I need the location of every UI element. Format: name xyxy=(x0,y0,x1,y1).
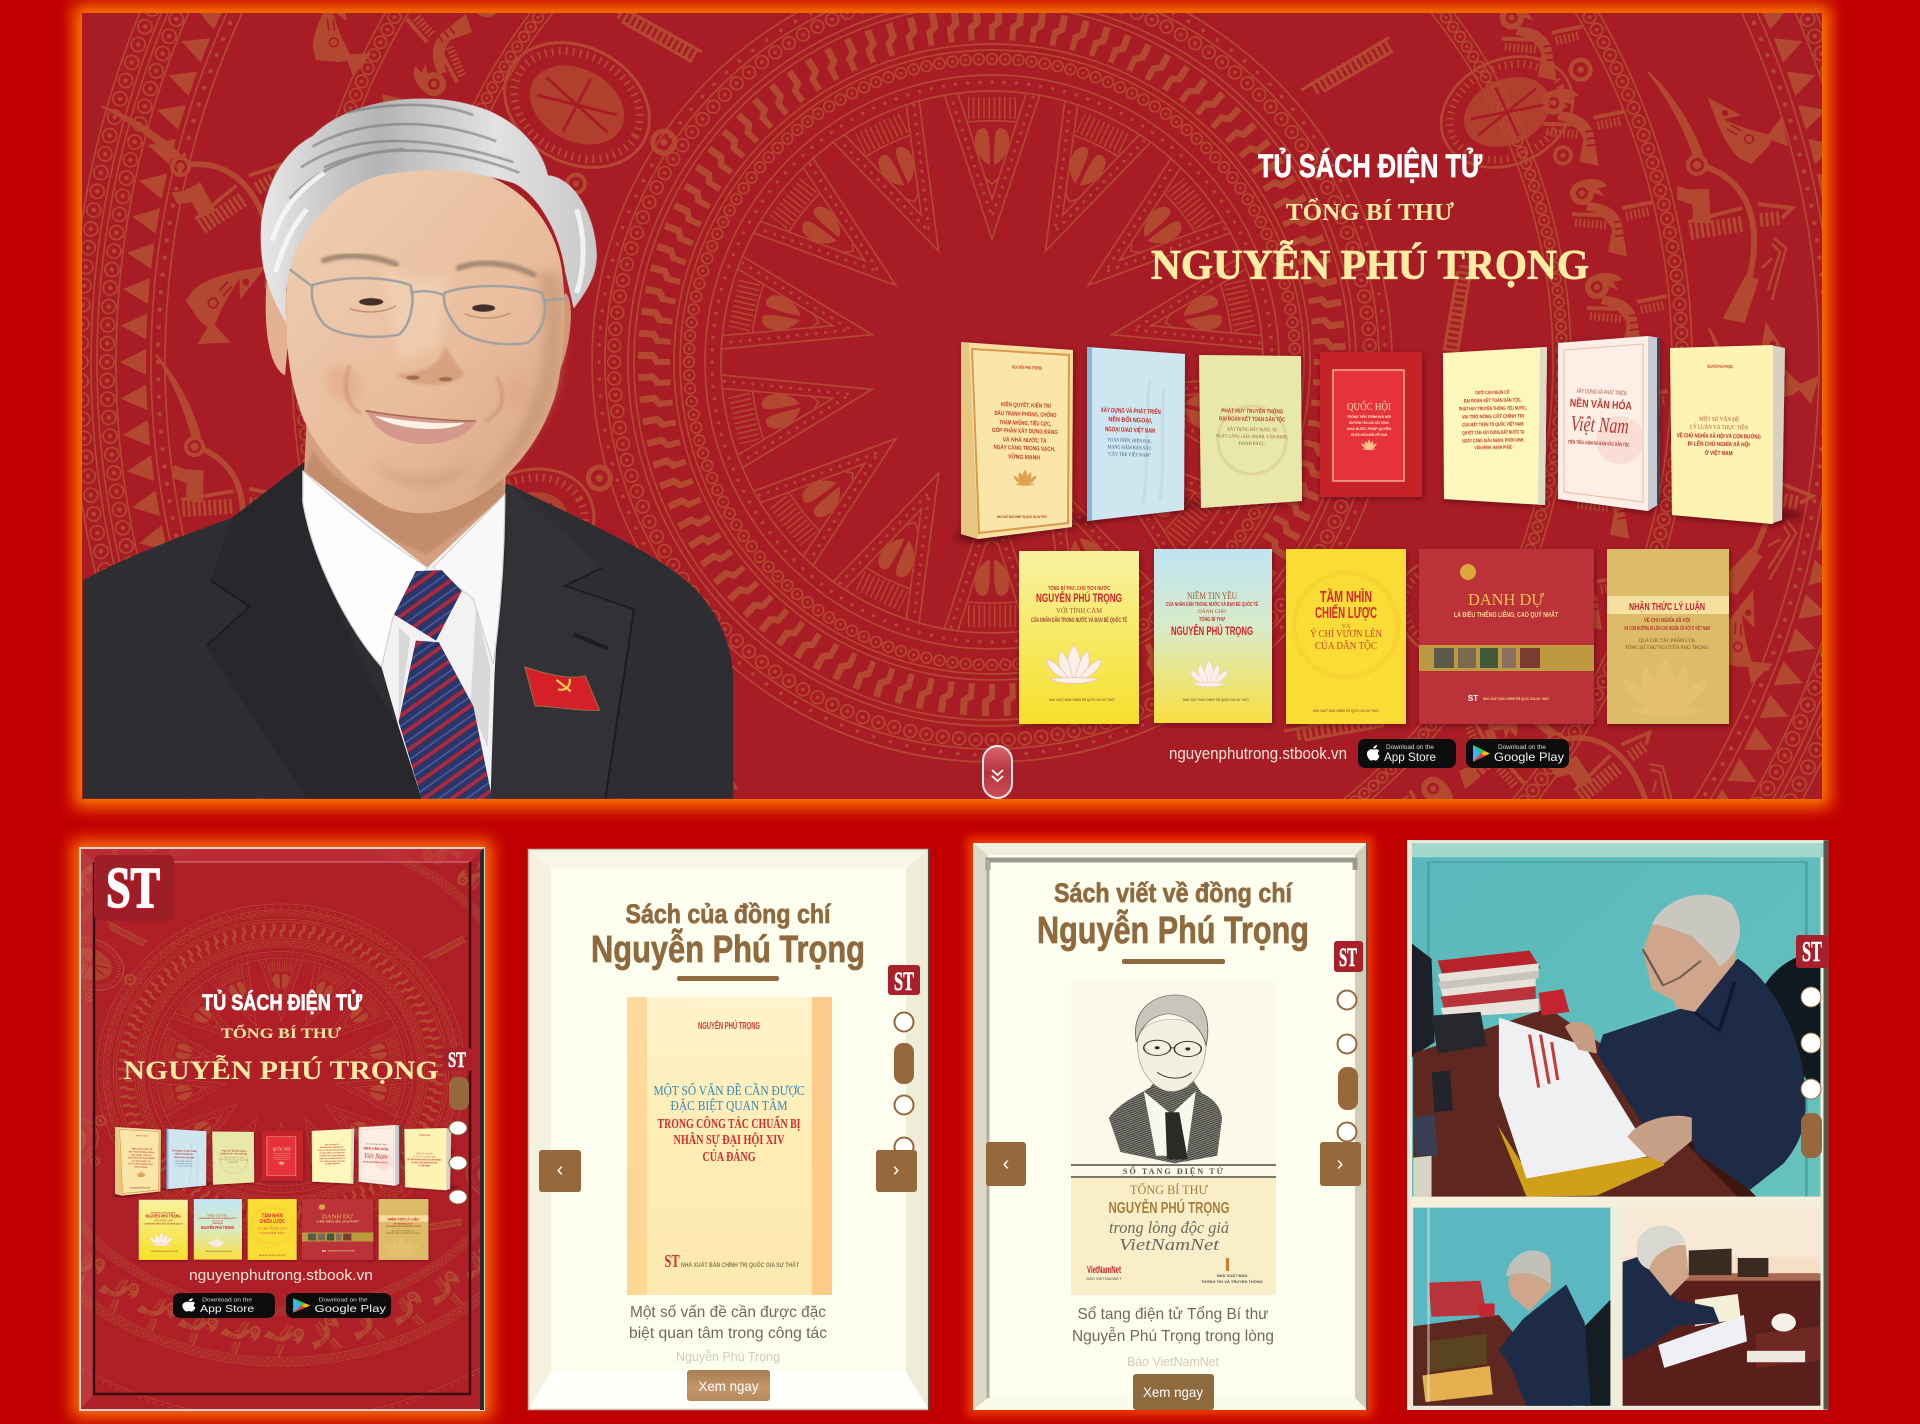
bottom right: man xyxy=(1623,1254,1719,1360)
suit jacket xyxy=(83,460,733,799)
next arrow: › xyxy=(893,1159,899,1181)
face shading xyxy=(326,262,564,497)
view button xyxy=(687,1370,770,1401)
book source: Báo VietNamNet xyxy=(1127,1354,1219,1369)
top photo: desk xyxy=(1413,1008,1756,1197)
nose xyxy=(396,345,465,385)
card Google Play badge xyxy=(286,1293,391,1318)
next arrow: › xyxy=(1337,1153,1343,1175)
cover: condolence book xyxy=(1071,982,1276,1295)
book cover: CỦA ĐẢNG xyxy=(702,1148,756,1165)
panel: books by comrade xyxy=(528,849,929,1410)
card glow xyxy=(72,840,492,1418)
card subtitle: TỔNG BÍ THƯ xyxy=(221,1024,341,1042)
panel: photo collage xyxy=(1407,840,1828,1410)
side ST icon: ST xyxy=(1339,943,1357,972)
card paper xyxy=(528,849,929,1410)
pencil sketch portrait xyxy=(1109,995,1222,1163)
side ST icon: ST xyxy=(1802,937,1822,968)
hero title: Tủ sách điện tử: TỦ SÁCH ĐIỆN TỬ xyxy=(1258,148,1482,184)
shirt body xyxy=(303,471,505,799)
top photo: white album xyxy=(1499,1018,1652,1178)
side ST icon xyxy=(1334,941,1363,972)
App Store badge xyxy=(1358,739,1456,768)
card bevel xyxy=(973,843,1367,1410)
hero orange glow xyxy=(74,5,1830,807)
neck xyxy=(304,418,509,567)
top photo: book stack xyxy=(1438,950,1541,980)
book caption: Một số vấn đề cần được đặc xyxy=(630,1304,826,1321)
top photo: remote and pens xyxy=(1432,1071,1453,1112)
cover: condolence book: NHÀ XUẤT BẢN xyxy=(1217,1273,1247,1278)
heading line 2: Nguyễn Phú Trọng xyxy=(591,927,865,971)
side nav xyxy=(894,1012,914,1156)
top photo: wall xyxy=(1412,840,1820,1197)
card background and drum xyxy=(81,410,483,1409)
bottom right: papers xyxy=(1658,1315,1747,1368)
eyes xyxy=(359,298,383,305)
top photo: left edge objects xyxy=(1412,944,1435,1057)
heading underline xyxy=(677,976,779,981)
panel: books about comrade xyxy=(967,837,1373,1416)
book cover: ST xyxy=(664,1251,680,1271)
book cover: NHÀ XUẤT BẢN CHÍNH TRỊ QUỐC GIA SỰ THẬT xyxy=(681,1261,799,1269)
view button xyxy=(1133,1374,1214,1410)
top photo: head xyxy=(1643,925,1738,1012)
top photo: shirt xyxy=(1597,959,1806,1190)
view button: Xem ngay xyxy=(1143,1384,1203,1400)
heading line 1: Sách viết về đồng chí xyxy=(1054,878,1293,908)
top photo: hands xyxy=(1565,1022,1597,1053)
hero website url: nguyenphutrong.stbook.vn xyxy=(1169,745,1347,763)
card url: nguyenphutrong.stbook.vn xyxy=(189,1267,373,1284)
top photo: yellow folder xyxy=(1498,1125,1664,1197)
card bevel xyxy=(80,848,484,1410)
next arrow xyxy=(876,1150,917,1192)
cover: condolence book: TỔNG BÍ THƯ xyxy=(1130,1182,1209,1197)
card title: TỦ SÁCH ĐIỆN TỬ xyxy=(202,990,363,1015)
book caption: Sổ tang điện tử Tổng Bí thư xyxy=(1078,1305,1269,1323)
hero subtitle: Tổng Bí thư: TỔNG BÍ THƯ xyxy=(1286,199,1454,226)
hero name: Nguyễn Phú Trọng: NGUYỄN PHÚ TRỌNG xyxy=(1151,240,1589,289)
previous arrow: ‹ xyxy=(557,1159,563,1181)
previous arrow: ‹ xyxy=(1003,1153,1009,1175)
bottom right photo xyxy=(1623,1208,1820,1406)
cover: condolence book: VietNamNet xyxy=(1119,1235,1221,1254)
hero background with drum pattern xyxy=(82,13,1822,799)
hair xyxy=(261,98,597,324)
previous arrow xyxy=(539,1150,581,1192)
flag pin xyxy=(525,667,600,710)
heading line 1: Sách của đồng chí xyxy=(626,899,832,929)
top photo: chair xyxy=(1762,953,1820,1095)
next arrow xyxy=(1320,1142,1361,1186)
necktie xyxy=(394,570,462,641)
cover: condolence book: VietNamNet xyxy=(1087,1265,1121,1276)
cover: condolence book: trong lòng độc giả xyxy=(1109,1218,1229,1237)
heading line 2: Nguyễn Phú Trọng xyxy=(1037,908,1309,952)
ears xyxy=(266,282,288,376)
card name: NGUYỄN PHÚ TRỌNG xyxy=(124,1056,438,1085)
card glow xyxy=(967,837,1373,1416)
shirt collar xyxy=(303,471,427,667)
hero book collection xyxy=(953,336,1804,724)
book cover: ĐẶC BIỆT QUAN TÂM xyxy=(670,1097,788,1114)
panel: e-bookshelf card xyxy=(0,682,708,1424)
previous arrow xyxy=(986,1142,1026,1186)
side ST icon: ST xyxy=(894,967,914,996)
card base xyxy=(1407,840,1828,1410)
side nav xyxy=(1801,987,1822,1158)
cover: condolence book: SỔ TANG ĐIỆN TỬ xyxy=(1123,1166,1224,1176)
heading underline xyxy=(1122,959,1225,964)
side ST icon xyxy=(1796,935,1828,968)
book cover: MỘT SỐ VẤN ĐỀ CẦN ĐƯỢC xyxy=(654,1081,804,1099)
side ST icon: ST xyxy=(448,1047,466,1072)
face xyxy=(287,162,565,513)
cover: condolence book: BÁO VIETNAMNET xyxy=(1086,1276,1122,1281)
mouth xyxy=(365,411,476,444)
card bevel xyxy=(528,849,929,1410)
card paper xyxy=(973,843,1367,1410)
side ST icon xyxy=(888,965,920,996)
book cover: NHÂN SỰ ĐẠI HỘI XIV xyxy=(674,1131,784,1148)
portrait photo xyxy=(83,98,733,799)
divider strip xyxy=(1412,1197,1820,1208)
card App Store badge xyxy=(173,1293,275,1318)
cover: condolence book: THÔNG TIN VÀ TRUYỀN THÔNG xyxy=(1201,1279,1263,1284)
book caption xyxy=(629,1304,827,1342)
Google Play badge xyxy=(1466,739,1569,768)
book author: Nguyễn Phú Trọng xyxy=(676,1349,780,1364)
scroll-down pill xyxy=(983,746,1012,798)
side nav xyxy=(449,1077,469,1204)
collage photos xyxy=(1410,840,1828,1410)
book caption xyxy=(1072,1305,1274,1345)
eyebrows xyxy=(324,256,396,264)
book caption: biệt quan tâm trong công tác xyxy=(629,1325,827,1342)
view button: Xem ngay xyxy=(698,1378,758,1394)
book cover: TRONG CÔNG TÁC CHUẨN BỊ xyxy=(658,1114,800,1132)
ST logo: ST xyxy=(106,855,160,920)
cover: condolence book: NGUYỄN PHÚ TRỌNG xyxy=(1108,1198,1230,1217)
book caption: Nguyễn Phú Trọng trong lòng xyxy=(1072,1326,1274,1345)
card mini books xyxy=(112,1125,459,1260)
book cover: NGUYỄN PHÚ TRỌNG xyxy=(698,1019,760,1032)
side nav xyxy=(1338,990,1358,1142)
bottom left photo xyxy=(1413,1208,1610,1406)
glasses xyxy=(290,269,568,344)
photo frame overlay xyxy=(1410,842,1826,1408)
book cover xyxy=(627,997,832,1295)
